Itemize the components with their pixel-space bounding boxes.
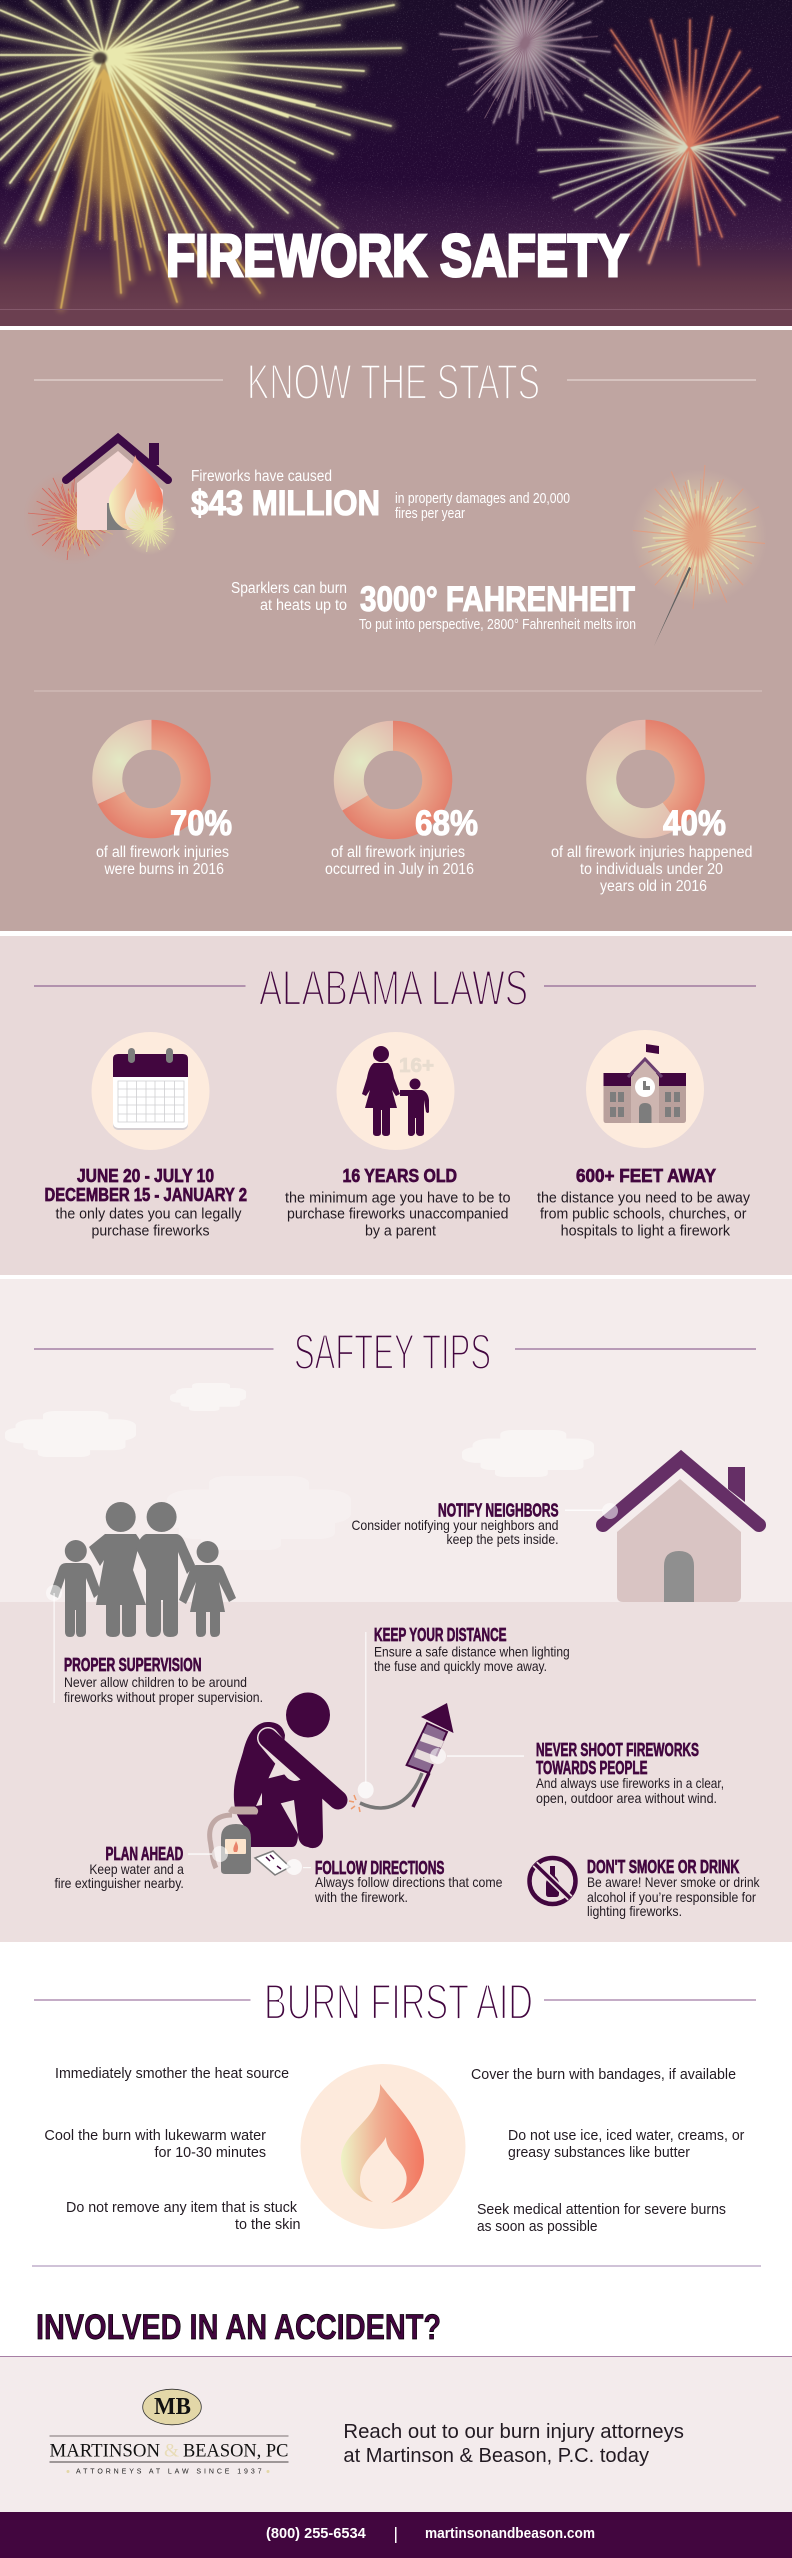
tip: proper supervision: fireworks without proper supervision.	[64, 1689, 263, 1705]
heading: involved in an accident: INVOLVED IN AN ACCIDENT?	[36, 2308, 441, 2347]
chart: donut 40%: to individuals under 20	[580, 861, 723, 878]
text: right first aid tips: Cover the burn with bandages, if available	[471, 2066, 736, 2083]
tip: keep your distance	[358, 1624, 570, 1798]
icon: person lighting firework	[234, 1692, 338, 1848]
tip: plan ahead	[54, 1843, 228, 1891]
panel: contact	[0, 2356, 792, 2512]
tip: keep your distance: Ensure a safe distance when lighting	[374, 1644, 570, 1660]
stat: sparkler heat: at heats up to	[260, 597, 347, 614]
icon: adult and child	[336, 1032, 454, 1150]
logo: MARTINSON	[50, 2441, 160, 2462]
text: call to action: Reach out to our burn injury attorneys	[343, 2421, 684, 2443]
chart: donut 40%: of all firework injuries happened	[551, 844, 752, 861]
text: right first aid tips: Do not use ice, iced water, creams, or	[508, 2127, 744, 2144]
text: left first aid tips: for 10-30 minutes	[154, 2144, 266, 2161]
chart: donut 70%: were burns in 2016	[104, 861, 224, 878]
tip: proper supervision: PROPER SUPERVISION	[64, 1654, 202, 1675]
text: right first aid tips	[471, 2066, 744, 2235]
text: minimum age: purchase fireworks unaccompanied	[287, 1206, 508, 1223]
text: minimum age: by a parent	[365, 1223, 437, 1240]
stat: property damage: in property damages and 20,000	[395, 490, 570, 507]
tip: plan ahead: Keep water and a	[89, 1861, 184, 1877]
chart: donut 40%	[551, 735, 752, 895]
chart: donut 68%: of all firework injuries	[331, 844, 465, 861]
tip: don't smoke or drink: Be aware! Never smoke or drink	[587, 1874, 760, 1890]
icon: flame	[300, 2064, 466, 2229]
heading: ALABAMA LAWS	[259, 960, 528, 1016]
logo	[50, 2389, 288, 2476]
icon: house	[565, 1459, 759, 1602]
stat: property damage	[191, 468, 570, 523]
icon: family	[50, 1502, 236, 1637]
chart: donut 70%: of all firework injuries	[96, 844, 229, 861]
text: distance: the distance you need to be away	[537, 1190, 750, 1206]
tip: notify neighbors: Consider notifying your neighbors and	[352, 1517, 558, 1533]
logo: &	[164, 2441, 179, 2462]
icon: calendar	[92, 1032, 210, 1150]
tip: never shoot fireworks towards people: open, outdoor area without wind.	[536, 1790, 717, 1806]
red firework	[538, 17, 792, 265]
text: call to action: at Martinson & Beason, P.C. today	[343, 2445, 649, 2467]
text: distance	[537, 1165, 750, 1240]
footer	[0, 2512, 792, 2558]
text: left first aid tips: Do not remove any item that is stuck	[66, 2199, 297, 2216]
title: FIREWORK SAFETY	[166, 223, 629, 289]
text: minimum age: 16 YEARS OLD	[342, 1165, 457, 1186]
heading: SAFTEY TIPS	[294, 1324, 491, 1380]
tip: never shoot fireworks towards people: NEVER SHOOT FIREWORKS	[536, 1739, 699, 1760]
icon: rocket firework	[349, 1703, 454, 1812]
text: distance: hospitals to light a firework	[561, 1223, 731, 1240]
icon: fire extinguisher	[210, 1808, 257, 1874]
footer: (800) 255-6534	[266, 2525, 366, 2542]
heading: BURN FIRST AID	[264, 1974, 533, 2030]
heading: KNOW THE STATS	[247, 354, 540, 410]
text: right first aid tips: greasy substances like butter	[508, 2144, 690, 2161]
text: left first aid tips: Cool the burn with lukewarm water	[44, 2127, 266, 2144]
chart: donut 40%: years old in 2016	[600, 878, 707, 895]
tip: keep your distance: KEEP YOUR DISTANCE	[374, 1624, 507, 1645]
text: legal dates: purchase fireworks	[92, 1223, 210, 1240]
tip: proper supervision: Never allow children to be around	[64, 1674, 247, 1690]
clouds	[5, 1383, 594, 1550]
tip: don't smoke or drink	[587, 1856, 760, 1919]
panel: alabama laws	[0, 936, 792, 1275]
stat: sparkler heat: 3000° FAHRENHEIT	[360, 580, 635, 619]
logo: ATTORNEYS AT LAW SINCE 1937	[76, 2469, 262, 2476]
text: minimum age: the minimum age you have to be to	[285, 1190, 510, 1206]
text: call to action	[343, 2421, 684, 2467]
chart: donut 70%	[96, 735, 232, 878]
icon: adult and child: 16+	[399, 1055, 434, 1077]
stat: sparkler heat: To put into perspective, 2800° Fahrenheit melts iron	[359, 617, 636, 633]
chart: donut 68%: 68%	[415, 804, 478, 843]
panel: safety tips	[0, 1279, 792, 1942]
text: minimum age	[285, 1165, 510, 1240]
tip: proper supervision	[46, 1585, 263, 1705]
chart: donut 68%: occurred in July in 2016	[325, 861, 474, 878]
chart: donut 68%	[325, 736, 478, 878]
panel: burn first aid	[32, 1974, 761, 2267]
tip: don't smoke or drink: alcohol if you’re responsible for	[587, 1889, 756, 1905]
text: left first aid tips: to the skin	[235, 2216, 300, 2233]
stat: sparkler heat	[231, 580, 636, 633]
text: legal dates: the only dates you can legally	[56, 1206, 242, 1223]
footer: martinsonandbeason.com	[425, 2525, 595, 2542]
stat: property damage: fires per year	[395, 505, 465, 522]
tip: follow directions	[286, 1857, 503, 1905]
pink firework	[424, 0, 629, 155]
text: legal dates	[44, 1165, 247, 1240]
logo: BEASON, PC	[183, 2441, 288, 2462]
text: distance: from public schools, churches, or	[540, 1206, 746, 1223]
stat: sparkler heat: Sparklers can burn	[231, 580, 347, 597]
stat: property damage: Fireworks have caused	[191, 468, 332, 485]
icon: burning house	[23, 438, 177, 566]
tip: plan ahead: PLAN AHEAD	[106, 1843, 183, 1864]
text: legal dates: DECEMBER 15 - JANUARY 2	[44, 1184, 247, 1205]
logo: MB	[154, 2394, 191, 2420]
icon: sparkler	[628, 454, 771, 646]
panel: header	[0, 0, 792, 326]
icon: instruction booklet	[255, 1851, 290, 1875]
tip: never shoot fireworks towards people: And always use fireworks in a clear,	[536, 1775, 724, 1791]
yellow firework	[0, 0, 401, 308]
tip: never shoot fireworks towards people: TOWARDS PEOPLE	[536, 1757, 648, 1778]
text: right first aid tips: as soon as possible	[477, 2218, 598, 2235]
tip: never shoot fireworks towards people	[430, 1739, 724, 1806]
tip: keep your distance: the fuse and quickly move away.	[374, 1658, 547, 1674]
tip: don't smoke or drink: lighting fireworks.	[587, 1903, 682, 1919]
tip: follow directions: with the firework.	[314, 1889, 408, 1905]
stat: property damage: $43 MILLION	[191, 484, 380, 523]
chart: donut 40%: 40%	[663, 804, 726, 843]
text: left first aid tips	[44, 2065, 301, 2233]
text: left first aid tips: Immediately smother the heat source	[55, 2065, 289, 2082]
icon: no smoking or drinking	[530, 1858, 576, 1904]
tip: plan ahead: fire extinguisher nearby.	[54, 1875, 184, 1891]
icon: school	[586, 1030, 704, 1148]
panel: know the stats	[0, 330, 792, 931]
tip: follow directions: Always follow directions that come	[315, 1874, 503, 1890]
tip: follow directions: FOLLOW DIRECTIONS	[315, 1857, 444, 1878]
text: legal dates: JUNE 20 - JULY 10	[77, 1165, 214, 1186]
tip: notify neighbors: keep the pets inside.	[446, 1531, 558, 1547]
text: right first aid tips: Seek medical attention for severe burns	[477, 2201, 726, 2218]
text: distance: 600+ FEET AWAY	[576, 1165, 717, 1186]
chart: donut 70%: 70%	[170, 804, 232, 843]
tip: notify neighbors: NOTIFY NEIGHBORS	[438, 1500, 559, 1521]
tip: notify neighbors	[352, 1500, 559, 1547]
